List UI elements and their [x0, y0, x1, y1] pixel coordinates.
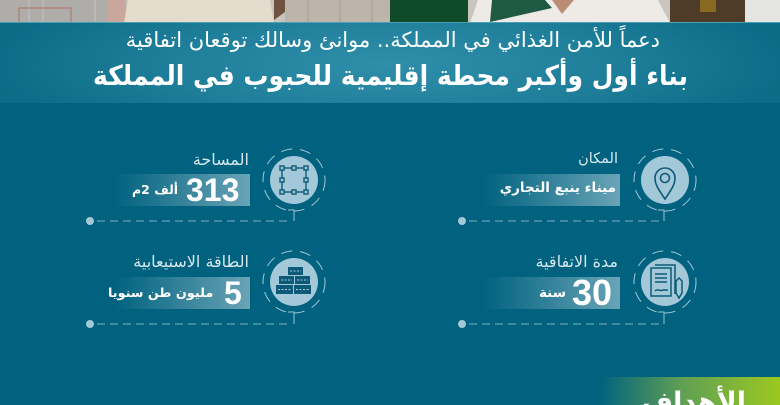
photo strip: [0, 0, 780, 22]
value unit: مليون طن سنويا: [108, 286, 213, 301]
value number: 313: [186, 172, 239, 208]
value bar: [114, 174, 250, 206]
connector line: [458, 312, 664, 328]
value bar: [114, 277, 250, 309]
header band: [0, 22, 780, 103]
value unit: سنة: [539, 285, 566, 301]
connector line: [86, 312, 294, 328]
label: الطاقة الاستيعابية: [133, 252, 249, 271]
value bar: [483, 277, 620, 309]
value number: 30: [572, 272, 612, 313]
label: المساحة: [193, 150, 249, 169]
value text: ميناء ينبع التجاري: [500, 180, 616, 196]
value number: 5: [224, 275, 242, 311]
label: المكان: [578, 151, 618, 167]
icon: location pin: [634, 148, 696, 212]
panel: capacity: [86, 250, 326, 328]
panel: duration: [458, 250, 696, 328]
title: بناء أول وأكبر محطة إقليمية للحبوب في المملكة: [93, 60, 688, 91]
value unit: ألف 2م: [132, 182, 178, 197]
panel: area: [86, 148, 326, 225]
icon: area square: [262, 148, 326, 212]
subtitle: دعماً للأمن الغذائي في المملكة.. موانئ وسالك توقعان اتفاقية: [126, 28, 660, 52]
label: مدة الاتفاقية: [536, 252, 618, 271]
icon: stacked containers: [262, 250, 326, 314]
connector line: [86, 210, 294, 225]
panel: location: [458, 148, 696, 225]
value bar: [483, 174, 620, 206]
goals banner: [600, 377, 780, 405]
icon: contract document: [634, 250, 696, 314]
connector line: [458, 210, 664, 225]
